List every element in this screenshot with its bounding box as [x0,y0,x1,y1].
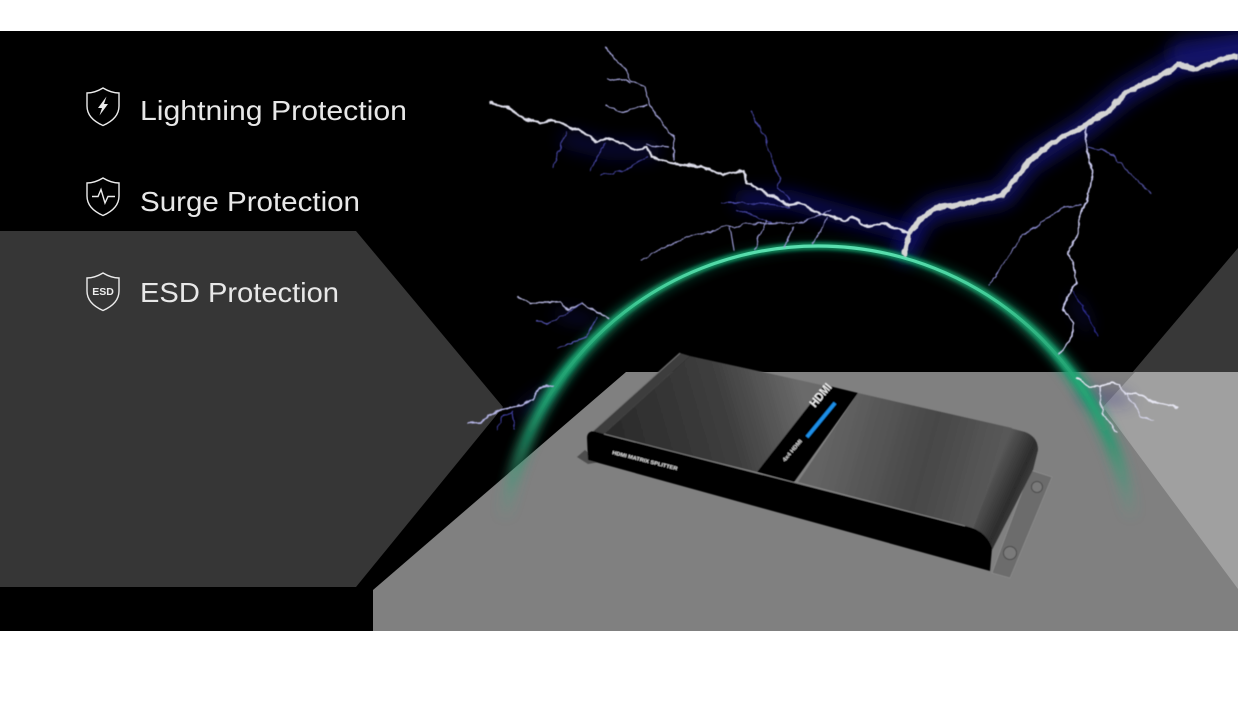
front face [587,431,992,571]
label: Lightning Protection [140,95,407,126]
black centre band [757,385,858,482]
icon: shield with bolt [87,88,119,126]
end cap [973,428,1038,550]
front edge highlight [604,434,965,526]
dim left branches [553,112,790,223]
icon: shield with ESD: ESD [92,286,114,298]
lower-right bolt [1078,378,1178,408]
label: Surge Protection [140,186,360,217]
band HDMI logo: HDMI [807,380,835,410]
top face left [604,356,826,472]
right descending bolts [1060,127,1093,353]
lightning bolts [468,48,1238,432]
band label: 4x4 HDMI [782,438,804,463]
HDMI splitter product [577,353,1052,578]
branches reaching the arc [642,210,831,260]
front panel label: HDMI MATRIX SPLITTER [612,450,678,472]
light grey floor facet [1103,372,1238,589]
feature: surge protection [87,178,360,217]
upper branches [606,48,674,160]
left dark grey hexagon panel [0,231,503,587]
green protective arc [502,246,1134,562]
main bolt left [490,102,909,233]
right dark grey hexagon panel [1103,248,1238,589]
lightning glow [520,45,1238,412]
feature: ESD protection [87,273,339,310]
top face right [798,393,1012,528]
main bolt right [904,55,1238,255]
lower-left bolts [518,297,608,318]
label: ESD Protection [140,277,339,308]
left rim [593,353,690,434]
icon: shield with ESD [87,273,119,310]
mounting flanges [577,450,1052,578]
grey floor surface [373,372,1238,631]
band blue bar [807,403,835,437]
icon: shield with pulse [87,178,119,216]
feature: lightning protection [87,88,407,126]
